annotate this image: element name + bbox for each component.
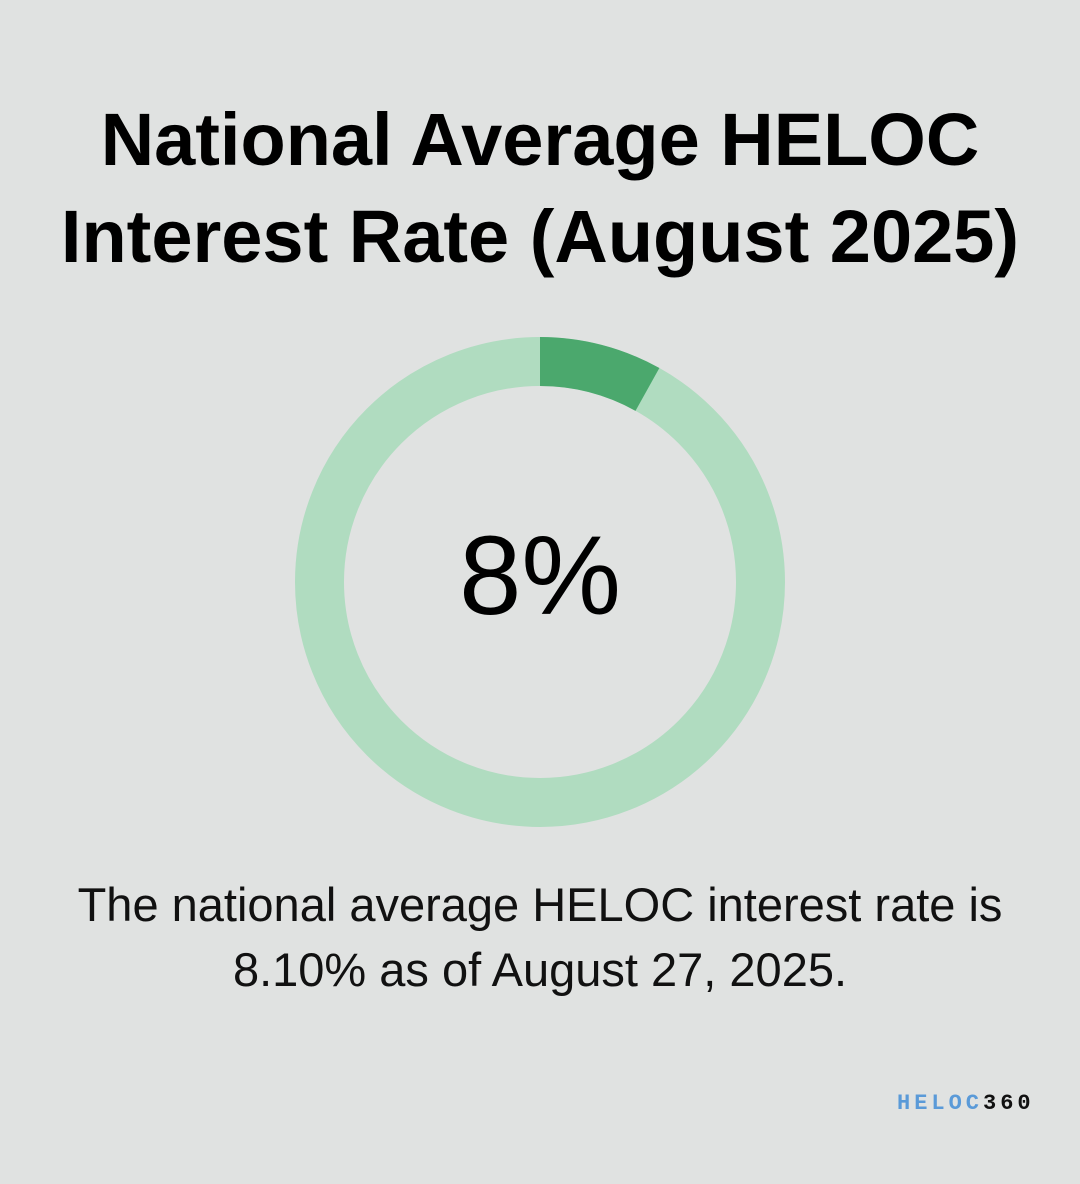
donut chart: 8%: [459, 513, 621, 638]
description text: [78, 878, 1002, 996]
title: National Average HELOC: [101, 98, 979, 181]
logo: HELOC360: [897, 1091, 1035, 1116]
description text: The national average HELOC interest rate is: [78, 878, 1002, 931]
title: [61, 98, 1019, 278]
title: Interest Rate (August 2025): [61, 195, 1019, 278]
description text: 8.10% as of August 27, 2025.: [233, 943, 847, 996]
